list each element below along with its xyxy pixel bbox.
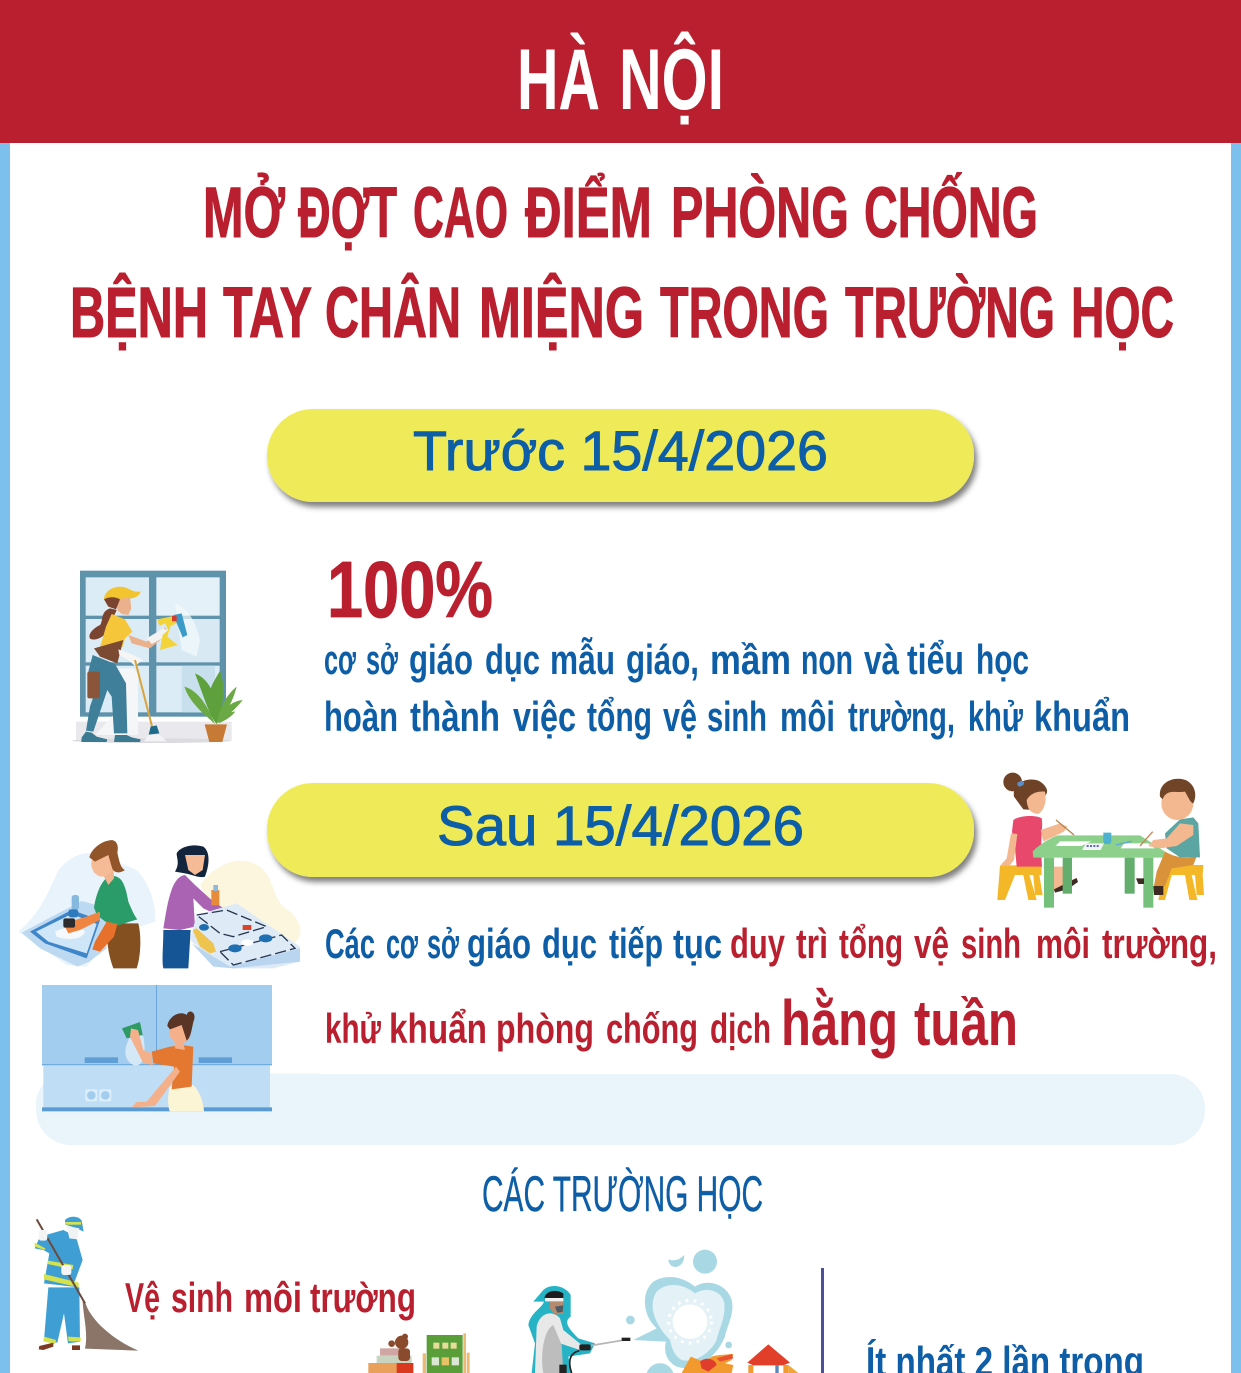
main heading: HỌC bbox=[1071, 274, 1174, 353]
body statement: hằng bbox=[781, 987, 898, 1059]
label: environmental sanitation: trường bbox=[310, 1274, 416, 1321]
light blue band bbox=[36, 1074, 1205, 1145]
illustration: children painting at a table bbox=[997, 773, 1204, 908]
body statement: Các bbox=[325, 920, 375, 967]
statistic description: thành bbox=[410, 693, 500, 740]
body statement: tuần bbox=[914, 987, 1018, 1059]
header title: HÀ bbox=[517, 32, 600, 128]
main heading: BỆNH bbox=[70, 273, 208, 353]
label: environmental sanitation bbox=[125, 1274, 416, 1321]
statistic description: và bbox=[864, 636, 899, 683]
main heading: CAO bbox=[413, 174, 508, 253]
cabinet bbox=[36, 1073, 320, 1120]
body statement: khuẩn bbox=[389, 1005, 487, 1052]
pill: after date bbox=[267, 783, 974, 877]
main heading: TRƯỜNG bbox=[845, 274, 1055, 353]
statistic description: non bbox=[801, 636, 853, 683]
statistic description: cơ bbox=[324, 636, 356, 683]
stove bbox=[190, 903, 300, 968]
illustration: worker spraying disinfectant bbox=[528, 1250, 798, 1373]
body statement: dịch bbox=[710, 1005, 771, 1052]
statistic description: mầm bbox=[710, 636, 791, 683]
body statement: vệ bbox=[914, 920, 949, 967]
statistic description: môi bbox=[780, 693, 835, 740]
main heading: TAY bbox=[223, 274, 312, 353]
statistic description: việc bbox=[513, 693, 576, 740]
section heading: schools: CÁC TRƯỜNG HỌC bbox=[482, 1166, 763, 1222]
body statement: tiếp bbox=[609, 920, 663, 967]
side strip right bbox=[1231, 143, 1241, 1373]
header title bbox=[517, 32, 724, 128]
body statement: môi bbox=[1036, 920, 1090, 967]
statistic description: dục bbox=[485, 636, 540, 683]
main heading: MIỆNG bbox=[479, 273, 644, 353]
statistic description: sở bbox=[366, 636, 398, 683]
illustration: women cleaning kitchen bbox=[18, 840, 320, 1120]
body statement: chống bbox=[606, 1005, 698, 1052]
pill: before date: Trước 15/4/2026 bbox=[413, 419, 828, 482]
pill: before date bbox=[267, 409, 974, 502]
label: environmental sanitation: môi bbox=[244, 1274, 302, 1321]
side strip left bbox=[0, 143, 10, 1373]
second woman bbox=[163, 930, 191, 968]
illustration: toys and board bbox=[368, 1333, 470, 1373]
main heading bbox=[70, 173, 1174, 353]
statistic description: giáo bbox=[409, 636, 473, 683]
statistic 100 percent: 100% bbox=[327, 545, 493, 634]
label: environmental sanitation: sinh bbox=[171, 1274, 233, 1321]
main heading: CHỐNG bbox=[864, 173, 1038, 253]
header title: NỘI bbox=[619, 32, 724, 128]
main heading: TRONG bbox=[660, 274, 829, 353]
statistic description: vệ bbox=[663, 693, 697, 740]
main heading: CHÂN bbox=[325, 273, 461, 353]
body statement: giáo bbox=[467, 920, 531, 967]
body statement: tục bbox=[673, 920, 722, 967]
illustration: woman cleaning a window bbox=[72, 571, 243, 743]
statistic description: tiểu bbox=[907, 636, 964, 683]
statistic description bbox=[324, 635, 1130, 740]
statistic description: khử bbox=[968, 693, 1023, 740]
body statement: duy bbox=[730, 920, 785, 967]
statistic description: sinh bbox=[707, 693, 767, 740]
body statement: sinh bbox=[961, 920, 1021, 967]
body statement: trì bbox=[796, 920, 828, 967]
statistic description: khuẩn bbox=[1034, 693, 1130, 740]
divider line bbox=[821, 1268, 824, 1373]
main heading: PHÒNG bbox=[671, 174, 849, 253]
statistic description: tổng bbox=[587, 693, 652, 740]
main heading: MỞ bbox=[203, 173, 285, 253]
statistic description: học bbox=[976, 636, 1029, 683]
body statement: khử bbox=[325, 1005, 381, 1052]
statistic description: giáo, bbox=[626, 636, 699, 683]
body statement: tổng bbox=[839, 920, 903, 967]
body statement: phòng bbox=[496, 1005, 594, 1052]
pill: after date: Sau 15/4/2026 bbox=[437, 794, 804, 857]
label: environmental sanitation: Vệ bbox=[125, 1274, 160, 1321]
body statement: cơ bbox=[386, 920, 418, 967]
body statement bbox=[325, 920, 1217, 1059]
sink bbox=[22, 901, 107, 967]
main heading: ĐIỂM bbox=[525, 173, 652, 253]
header banner bbox=[0, 0, 1241, 143]
statistic description: mẫu bbox=[550, 635, 615, 683]
body statement: dục bbox=[542, 920, 597, 967]
statistic description: hoàn bbox=[324, 693, 398, 740]
illustration: street cleaner sweeping bbox=[35, 1217, 138, 1351]
body statement: sở bbox=[427, 920, 459, 967]
statistic description: trường, bbox=[848, 693, 955, 740]
main heading: ĐỢT bbox=[298, 174, 397, 253]
